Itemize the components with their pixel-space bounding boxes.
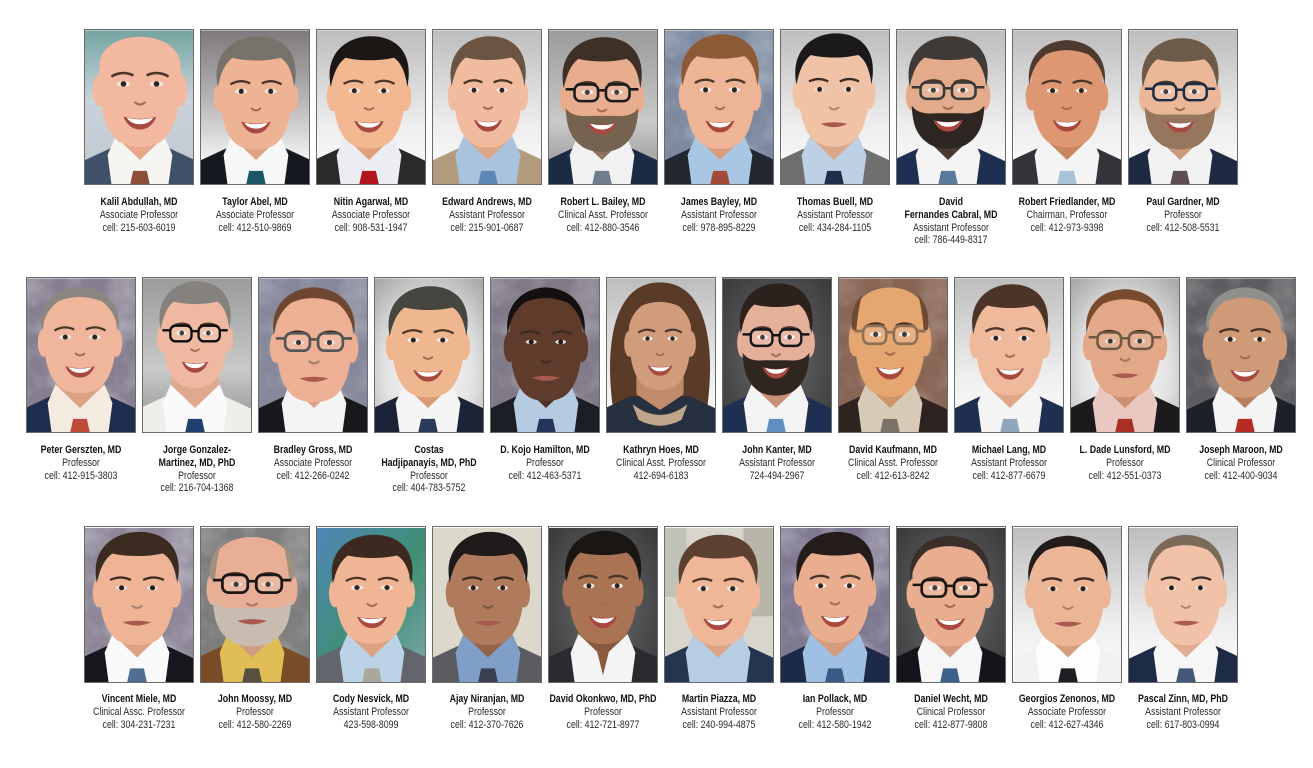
profile: Pascal Zinn (1128, 526, 1238, 683)
caption: Jorge Gonzalez-Martinez: Professor (178, 470, 216, 482)
caption: Nitin Agarwal: Nitin Agarwal, MD (334, 196, 408, 208)
caption: Robert Friedlander: Robert Friedlander, MD (1019, 196, 1115, 208)
portrait: Peter Gerszten (26, 277, 136, 433)
caption: Ajay Niranjan: Professor (468, 706, 506, 718)
caption: Paul Gardner: cell: 412-508-5531 (1147, 222, 1219, 234)
portrait: Nitin Agarwal (316, 29, 426, 185)
caption: Georgios Zenonos: cell: 412-627-4346 (1031, 719, 1103, 731)
caption: Ian Pollack (779, 693, 891, 731)
portrait: Edward Andrews (432, 29, 542, 185)
portrait: Joseph Maroon (1186, 277, 1296, 433)
profile: Bradley Gross (258, 277, 368, 482)
caption: Joseph Maroon (1185, 444, 1297, 482)
portrait: Bradley Gross (258, 277, 368, 433)
caption: Ajay Niranjan: cell: 412-370-7626 (451, 719, 523, 731)
caption: Robert Friedlander: Chairman, Professor (1027, 209, 1107, 221)
portrait: Jorge Gonzalez-Martinez (142, 277, 252, 433)
caption: John Moossy: cell: 412-580-2269 (219, 719, 291, 731)
portrait: Costas Hadjipanayis (374, 277, 484, 433)
caption: Daniel Wecht: Clinical Professor (917, 706, 985, 718)
profile: Georgios Zenonos (1012, 526, 1122, 683)
caption: Taylor Abel: Taylor Abel, MD (222, 196, 288, 208)
caption: David Fernandes Cabral: Assistant Professor (913, 222, 989, 234)
profile: Nitin Agarwal (316, 29, 426, 234)
portrait: David Okonkwo (548, 526, 658, 683)
portrait: Vincent Miele (84, 526, 194, 683)
profile: Robert Friedlander (1012, 29, 1122, 234)
portrait: Paul Gardner (1128, 29, 1238, 185)
portrait: James Bayley (664, 29, 774, 185)
caption: David Fernandes Cabral: David (939, 196, 963, 208)
profile: D. Kojo Hamilton (490, 277, 600, 482)
caption: John Kanter: John Kanter, MD (742, 444, 812, 456)
caption: Robert L. Bailey (558, 196, 648, 234)
portrait: Pascal Zinn (1128, 526, 1238, 683)
caption: Taylor Abel: Associate Professor (216, 209, 294, 221)
portrait: L. Dade Lunsford (1070, 277, 1180, 433)
caption: Thomas Buell (796, 196, 873, 234)
caption: Paul Gardner: Paul Gardner, MD (1146, 196, 1220, 208)
caption: James Bayley: Assistant Professor (681, 209, 757, 221)
profile: Michael Lang (954, 277, 1064, 482)
profile: Thomas Buell (780, 29, 890, 234)
caption: Daniel Wecht: Daniel Wecht, MD (914, 693, 988, 705)
caption: Kalil Abdullah: Associate Professor (100, 209, 178, 221)
caption: John Kanter: Assistant Professor (739, 457, 815, 469)
caption: David Fernandes Cabral: cell: 786-449-8317 (915, 234, 987, 246)
caption: Michael Lang: cell: 412-877-6679 (973, 470, 1045, 482)
portrait: David Fernandes Cabral (896, 29, 1006, 185)
profile: Daniel Wecht (896, 526, 1006, 683)
portrait: Martin Piazza (664, 526, 774, 683)
caption: Jorge Gonzalez-Martinez: Jorge Gonzalez- (163, 444, 231, 456)
caption: Kalil Abdullah: Kalil Abdullah, MD (101, 196, 177, 208)
caption: Jorge Gonzalez-Martinez: cell: 216-704-1368 (161, 482, 233, 494)
caption: James Bayley: cell: 978-895-8229 (683, 222, 755, 234)
profile: Ajay Niranjan (432, 526, 542, 683)
caption: Bradley Gross (274, 444, 352, 482)
caption: Kathryn Hoes: Clinical Asst. Professor (616, 457, 706, 469)
portrait: Kalil Abdullah (84, 29, 194, 185)
caption: Georgios Zenonos (1011, 693, 1123, 731)
caption: John Kanter (739, 444, 815, 482)
caption: L. Dade Lunsford (1069, 444, 1181, 482)
caption: Martin Piazza: Martin Piazza, MD (682, 693, 756, 705)
caption: James Bayley: James Bayley, MD (681, 196, 757, 208)
caption: Kathryn Hoes: 412-694-6183 (634, 470, 688, 482)
caption: John Moossy (199, 693, 311, 731)
caption: D. Kojo Hamilton: cell: 412-463-5371 (509, 470, 581, 482)
caption: Bradley Gross: Associate Professor (274, 457, 352, 469)
caption: Pascal Zinn: Assistant Professor (1145, 706, 1221, 718)
caption: Kalil Abdullah (100, 196, 178, 234)
profile: Kalil Abdullah (84, 29, 194, 234)
caption: James Bayley (681, 196, 757, 234)
caption: Cody Nesvick (315, 693, 427, 731)
portrait: Ian Pollack (780, 526, 890, 683)
caption: D. Kojo Hamilton: D. Kojo Hamilton, MD (500, 444, 590, 456)
caption: Joseph Maroon: Joseph Maroon, MD (1199, 444, 1283, 456)
profile: L. Dade Lunsford (1070, 277, 1180, 433)
caption: David Okonkwo (547, 693, 659, 731)
profile: Paul Gardner (1128, 29, 1238, 234)
caption: Edward Andrews (442, 196, 532, 234)
caption: Robert L. Bailey: Robert L. Bailey, MD (561, 196, 645, 208)
profile: Costas Hadjipanayis (374, 277, 484, 494)
caption: John Kanter: 724-494-2967 (750, 470, 804, 482)
caption: Robert L. Bailey: cell: 412-880-3546 (567, 222, 639, 234)
caption: Kalil Abdullah: cell: 215-603-6019 (103, 222, 175, 234)
profile: Taylor Abel (200, 29, 310, 234)
caption: Costas Hadjipanayis: Costas (414, 444, 444, 456)
profile: David Fernandes Cabral (896, 29, 1006, 246)
caption: Peter Gerszten: Peter Gerszten, MD (41, 444, 121, 456)
caption: Vincent Miele: Clinical Assc. Professor (93, 706, 185, 718)
caption: David Fernandes Cabral: Fernandes Cabral, MD (905, 209, 997, 221)
caption: Michael Lang: Assistant Professor (971, 457, 1047, 469)
caption: Taylor Abel (216, 196, 294, 234)
caption: Edward Andrews: Assistant Professor (449, 209, 525, 221)
caption: Cody Nesvick: Cody Nesvick, MD (333, 693, 409, 705)
portrait: Cody Nesvick (316, 526, 426, 683)
caption: Kathryn Hoes (616, 444, 706, 482)
caption: Costas Hadjipanayis (381, 444, 477, 494)
caption: Martin Piazza: cell: 240-994-4875 (683, 719, 755, 731)
portrait: John Moossy (200, 526, 310, 683)
caption: D. Kojo Hamilton: Professor (526, 457, 564, 469)
caption: David Okonkwo: cell: 412-721-8977 (567, 719, 639, 731)
profile: Ian Pollack (780, 526, 890, 683)
caption: Daniel Wecht: cell: 412-877-9808 (915, 719, 987, 731)
caption: Nitin Agarwal: cell: 908-531-1947 (335, 222, 407, 234)
faculty row 2 (26, 277, 1296, 494)
profile: Edward Andrews (432, 29, 542, 234)
profile: Jorge Gonzalez-Martinez (142, 277, 252, 494)
caption: David Kaufmann: David Kaufmann, MD (849, 444, 937, 456)
portrait: D. Kojo Hamilton (490, 277, 600, 433)
portrait: John Kanter (722, 277, 832, 433)
caption: Jorge Gonzalez-Martinez (159, 444, 235, 494)
caption: Thomas Buell: cell: 434-284-1105 (799, 222, 871, 234)
caption: Georgios Zenonos: Georgios Zenonos, MD (1019, 693, 1115, 705)
profile: Cody Nesvick (316, 526, 426, 683)
profile: Kathryn Hoes (606, 277, 716, 482)
caption: Martin Piazza (663, 693, 775, 731)
caption: Costas Hadjipanayis: Professor (410, 470, 448, 482)
profile: John Moossy (200, 526, 310, 683)
portrait: Robert Friedlander (1012, 29, 1122, 185)
caption: John Moossy: Professor (236, 706, 274, 718)
caption: Georgios Zenonos: Associate Professor (1028, 706, 1106, 718)
caption: David Kaufmann: cell: 412-613-8242 (857, 470, 929, 482)
caption: Michael Lang: Michael Lang, MD (972, 444, 1046, 456)
caption: Ajay Niranjan: Ajay Niranjan, MD (450, 693, 524, 705)
caption: Ian Pollack: Professor (816, 706, 854, 718)
caption: Pascal Zinn: cell: 617-803-0994 (1147, 719, 1219, 731)
portrait: Daniel Wecht (896, 526, 1006, 683)
portrait: Ajay Niranjan (432, 526, 542, 683)
profile: David Kaufmann (838, 277, 948, 482)
caption: Michael Lang (971, 444, 1047, 482)
caption: Taylor Abel: cell: 412-510-9869 (219, 222, 291, 234)
caption: L. Dade Lunsford: Professor (1106, 457, 1144, 469)
caption: Bradley Gross: Bradley Gross, MD (274, 444, 352, 456)
caption: Nitin Agarwal: Associate Professor (332, 209, 410, 221)
caption: Daniel Wecht (895, 693, 1007, 731)
caption: Joseph Maroon: Clinical Professor (1207, 457, 1275, 469)
caption: Bradley Gross: cell: 412-266-0242 (277, 470, 349, 482)
profile: John Kanter (722, 277, 832, 482)
caption: Costas Hadjipanayis: Hadjipanayis, MD, PhD (381, 457, 477, 469)
caption: Thomas Buell: Thomas Buell, MD (797, 196, 873, 208)
caption: Ajay Niranjan (431, 693, 543, 731)
caption: Martin Piazza: Assistant Professor (681, 706, 757, 718)
caption: David Kaufmann: Clinical Asst. Professor (848, 457, 938, 469)
caption: D. Kojo Hamilton (500, 444, 590, 482)
profile: James Bayley (664, 29, 774, 234)
caption: David Okonkwo: David Okonkwo, MD, PhD (549, 693, 657, 705)
portrait: Thomas Buell (780, 29, 890, 185)
portrait: Kathryn Hoes (606, 277, 716, 433)
portrait: Georgios Zenonos (1012, 526, 1122, 683)
profile: Joseph Maroon (1186, 277, 1296, 433)
caption: Jorge Gonzalez-Martinez: Martinez, MD, PhD (159, 457, 235, 469)
faculty row 3 (84, 526, 1238, 730)
caption: John Moossy: John Moossy, MD (218, 693, 292, 705)
caption: David Kaufmann (848, 444, 938, 482)
profile: Martin Piazza (664, 526, 774, 683)
caption: Cody Nesvick: Assistant Professor (333, 706, 409, 718)
caption: Robert L. Bailey: Clinical Asst. Professor (558, 209, 648, 221)
faculty row 1 (84, 29, 1238, 246)
profile: Vincent Miele (84, 526, 194, 683)
caption: L. Dade Lunsford: L. Dade Lunsford, MD (1080, 444, 1170, 456)
caption: Thomas Buell: Assistant Professor (797, 209, 873, 221)
caption: Ian Pollack: Ian Pollack, MD (803, 693, 867, 705)
portrait: David Kaufmann (838, 277, 948, 433)
caption: Edward Andrews: Edward Andrews, MD (442, 196, 532, 208)
portrait: Taylor Abel (200, 29, 310, 185)
caption: Robert Friedlander: cell: 412-973-9398 (1031, 222, 1103, 234)
caption: Ian Pollack: cell: 412-580-1942 (799, 719, 871, 731)
caption: Costas Hadjipanayis: cell: 404-783-5752 (393, 482, 465, 494)
caption: Peter Gerszten: cell: 412-915-3803 (45, 470, 117, 482)
caption: Edward Andrews: cell: 215-901-0687 (451, 222, 523, 234)
caption: Vincent Miele (83, 693, 195, 731)
profile: Peter Gerszten (26, 277, 136, 482)
caption: Peter Gerszten: Professor (62, 457, 100, 469)
profile: Robert L. Bailey (548, 29, 658, 234)
caption: Kathryn Hoes: Kathryn Hoes, MD (623, 444, 699, 456)
portrait: Robert L. Bailey (548, 29, 658, 185)
caption: David Okonkwo: Professor (584, 706, 622, 718)
caption: Vincent Miele: Vincent Miele, MD (102, 693, 176, 705)
caption: Cody Nesvick: 423-598-8099 (344, 719, 398, 731)
caption: Paul Gardner (1146, 196, 1220, 234)
caption: Nitin Agarwal (332, 196, 410, 234)
caption: Pascal Zinn (1127, 693, 1239, 731)
caption: Robert Friedlander (1019, 196, 1115, 234)
profile: David Okonkwo (548, 526, 658, 683)
portrait: Michael Lang (954, 277, 1064, 433)
caption: Vincent Miele: cell: 304-231-7231 (103, 719, 175, 731)
caption: L. Dade Lunsford: cell: 412-551-0373 (1089, 470, 1161, 482)
caption: Pascal Zinn: Pascal Zinn, MD, PhD (1138, 693, 1228, 705)
caption: Joseph Maroon: cell: 412-400-9034 (1205, 470, 1277, 482)
caption: Paul Gardner: Professor (1164, 209, 1202, 221)
caption: Peter Gerszten (41, 444, 121, 482)
caption: David Fernandes Cabral (905, 196, 998, 246)
